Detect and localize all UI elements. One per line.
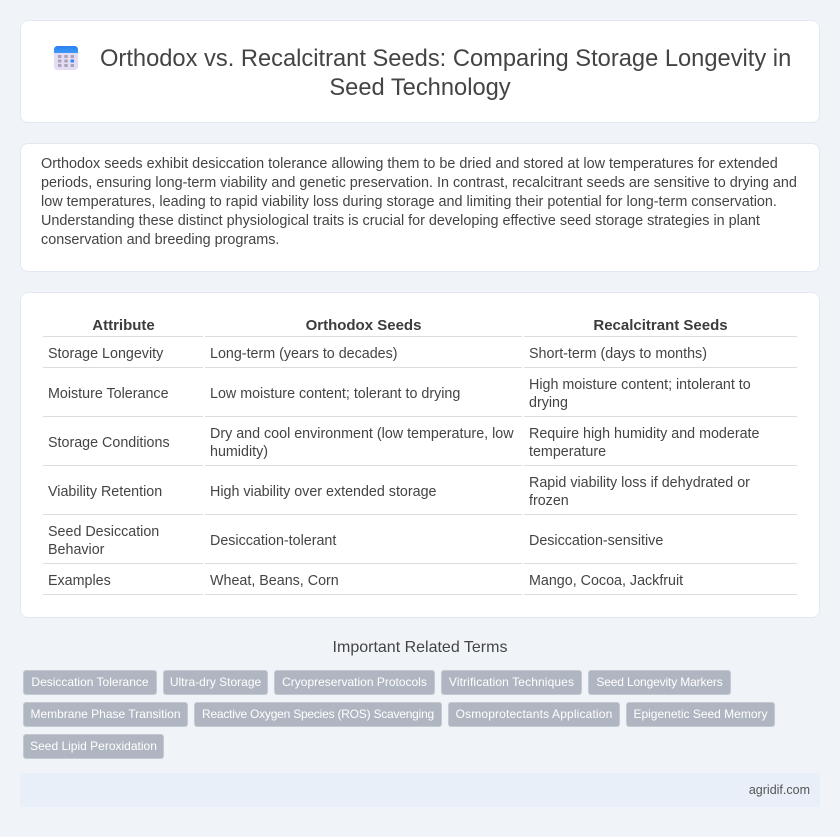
heading: important related terms: Important Related Terms (333, 639, 507, 656)
related terms tags (23, 670, 775, 759)
table header: recalcitrant seeds: Recalcitrant Seeds (593, 317, 728, 334)
row: viability retention: Rapid viability loss if dehydrated or (529, 475, 750, 491)
row: seed desiccation behavior: Desiccation-tolerant (210, 533, 336, 549)
row: storage longevity (48, 346, 707, 362)
row: storage longevity: Long-term (years to decades) (210, 346, 398, 362)
row: viability retention: Viability Retention (48, 484, 162, 500)
tag: Reactive Oxygen Species (ROS) Scavenging (202, 707, 434, 721)
row: examples: Examples (48, 573, 111, 589)
row: storage longevity: Storage Longevity (48, 346, 163, 362)
tag (274, 670, 435, 695)
introduction text: conservation and breeding programs. (41, 232, 279, 248)
introduction text: periods, ensuring long-term viability and genetic preservation. In contrast, recalcitrant seeds are sensitive to drying and (41, 175, 797, 191)
tag: Ultra-dry Storage (170, 675, 261, 689)
row: examples: Wheat, Beans, Corn (210, 573, 339, 589)
tag (163, 670, 268, 695)
tag: Seed Lipid Peroxidation (30, 739, 157, 753)
row: storage conditions: temperature (529, 444, 606, 460)
row: storage longevity: Short-term (days to months) (529, 346, 707, 362)
tag: Epigenetic Seed Memory (633, 707, 768, 721)
introduction text (41, 156, 797, 248)
header panel (20, 20, 820, 123)
tag: Cryopreservation Protocols (282, 675, 427, 689)
row: viability retention (48, 475, 750, 509)
tag (23, 702, 188, 727)
row: moisture tolerance: drying (529, 395, 568, 411)
tag: Vitrification Techniques (449, 675, 574, 689)
row: moisture tolerance: Moisture Tolerance (48, 386, 169, 402)
row: viability retention: High viability over extended storage (210, 484, 436, 500)
row: moisture tolerance (48, 377, 751, 411)
row: viability retention: frozen (529, 493, 569, 509)
tag (23, 670, 157, 695)
introduction text: Orthodox seeds exhibit desiccation tolerance allowing them to be dried and stored at low temperatures for extended (41, 156, 778, 172)
tag (23, 734, 164, 759)
introduction text: Understanding these distinct physiological traits is crucial for developing effective seed storage strategies in plant (41, 213, 760, 229)
panel: introduction (20, 143, 820, 272)
row: storage conditions: Require high humidity and moderate (529, 426, 759, 442)
panel: comparison table (20, 292, 820, 618)
tag: Osmoprotectants Application (456, 707, 612, 721)
tag (448, 702, 620, 727)
row: examples: Mango, Cocoa, Jackfruit (529, 573, 683, 589)
row: storage conditions (48, 426, 759, 460)
tag (194, 702, 442, 727)
row: seed desiccation behavior: Seed Desiccation (48, 524, 159, 540)
row: storage conditions: humidity) (210, 444, 268, 460)
row: seed desiccation behavior (48, 524, 663, 558)
title (100, 46, 791, 101)
footer bar (20, 773, 820, 807)
table header: orthodox seeds: Orthodox Seeds (306, 317, 421, 334)
tag: Seed Longevity Markers (596, 675, 723, 689)
row: seed desiccation behavior: Behavior (48, 542, 104, 558)
row: seed desiccation behavior: Desiccation-sensitive (529, 533, 663, 549)
row: moisture tolerance: Low moisture content; tolerant to drying (210, 386, 460, 402)
introduction text: low temperatures, leading to rapid viability loss during storage and limiting their potential for long-term conservation. (41, 194, 777, 210)
row: storage conditions: Storage Conditions (48, 435, 170, 451)
title line 2: Seed Technology (329, 75, 511, 101)
icon: calendar grid (54, 46, 78, 70)
footer source: agridif.com (749, 783, 810, 797)
title line 1: Orthodox vs. Recalcitrant Seeds: Comparing Storage Longevity in (100, 46, 791, 72)
tag: Desiccation Tolerance (31, 675, 149, 689)
tag (441, 670, 582, 695)
row: storage conditions: Dry and cool environment (low temperature, low (210, 426, 514, 442)
tag (626, 702, 775, 727)
row: examples (48, 573, 683, 589)
tag (588, 670, 731, 695)
table header: attribute: Attribute (92, 317, 155, 334)
row: moisture tolerance: High moisture content; intolerant to (529, 377, 751, 393)
tag: Membrane Phase Transition (30, 707, 181, 721)
